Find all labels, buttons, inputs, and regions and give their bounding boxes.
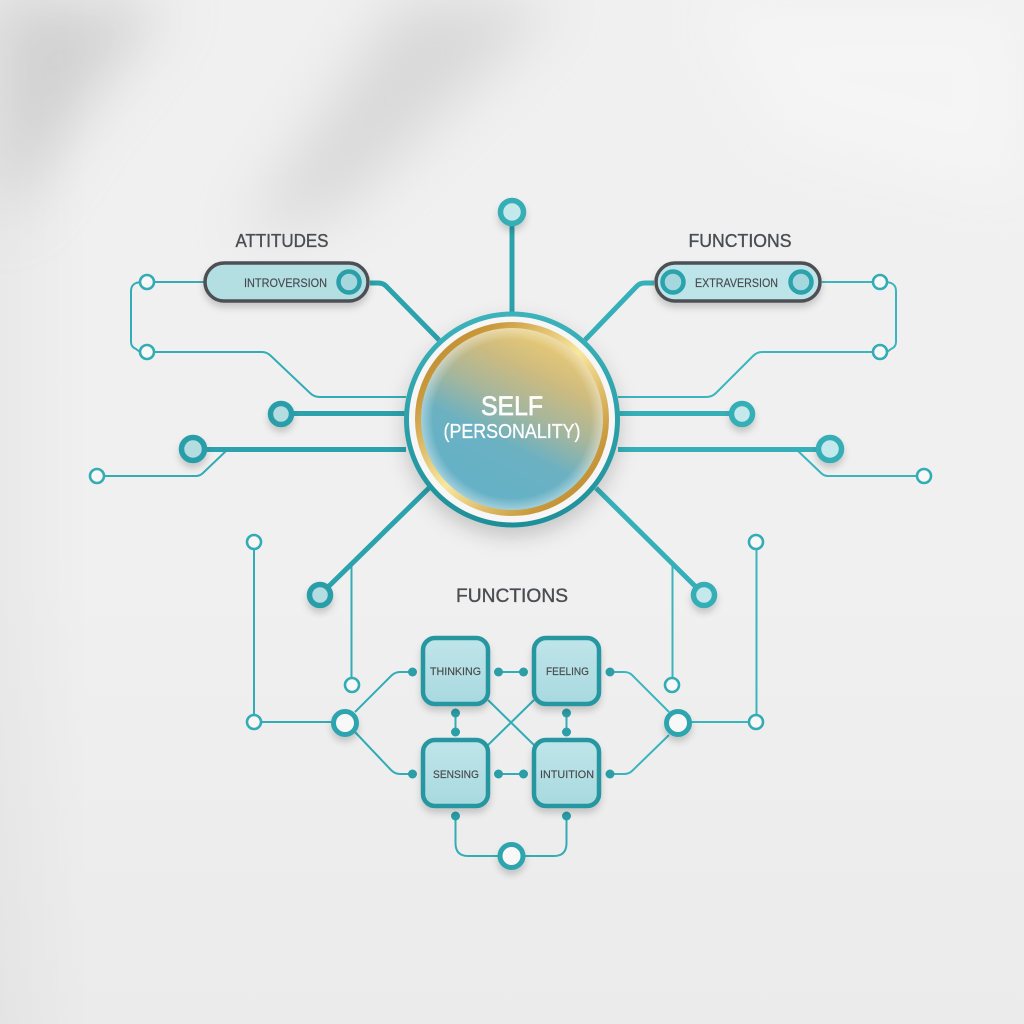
connector: thin far left wire bbox=[104, 451, 226, 476]
text: personality: (PERSONALITY) bbox=[444, 421, 580, 443]
heading: functions lower: FUNCTIONS bbox=[456, 585, 568, 607]
connectors: lower vertical wires bbox=[254, 549, 756, 722]
box: sensing bbox=[423, 740, 488, 806]
hub: bottom bbox=[500, 844, 523, 868]
connector: thin left circuit bbox=[131, 282, 406, 397]
small nodes: white terminals bbox=[90, 275, 931, 729]
connector: thin right circuit bbox=[618, 282, 896, 397]
node: top bbox=[500, 200, 524, 224]
connector dots bbox=[408, 668, 614, 820]
box: intuition bbox=[534, 740, 599, 806]
node: right lower bbox=[818, 438, 842, 460]
node: left lower bbox=[182, 438, 204, 460]
node: lower right bbox=[694, 584, 714, 606]
hub: left bbox=[334, 712, 356, 734]
box: thinking bbox=[423, 638, 488, 704]
box: feeling bbox=[534, 638, 599, 704]
node: right upper bbox=[732, 404, 752, 424]
connector: thin far right wire bbox=[798, 451, 917, 476]
node: lower left bbox=[310, 584, 330, 606]
box: feeling: FEELING bbox=[546, 666, 589, 678]
node: left upper bbox=[270, 404, 292, 424]
box: sensing: SENSING bbox=[433, 769, 479, 781]
central circle: self bbox=[406, 314, 618, 525]
box: intuition: INTUITION bbox=[540, 769, 594, 781]
connectors: thick spokes bbox=[205, 224, 818, 588]
function network wires bbox=[355, 672, 669, 856]
pill: extraversion: EXTRAVERSION bbox=[695, 276, 778, 290]
heading: attitudes: ATTITUDES bbox=[236, 231, 328, 251]
pill: introversion bbox=[205, 263, 368, 301]
pill: extraversion bbox=[656, 263, 820, 301]
heading: functions upper right: FUNCTIONS bbox=[688, 231, 792, 251]
box: thinking: THINKING bbox=[430, 666, 481, 678]
hub: right bbox=[666, 712, 690, 734]
pill: introversion: INTROVERSION bbox=[244, 276, 327, 290]
text: self: SELF bbox=[481, 391, 543, 421]
